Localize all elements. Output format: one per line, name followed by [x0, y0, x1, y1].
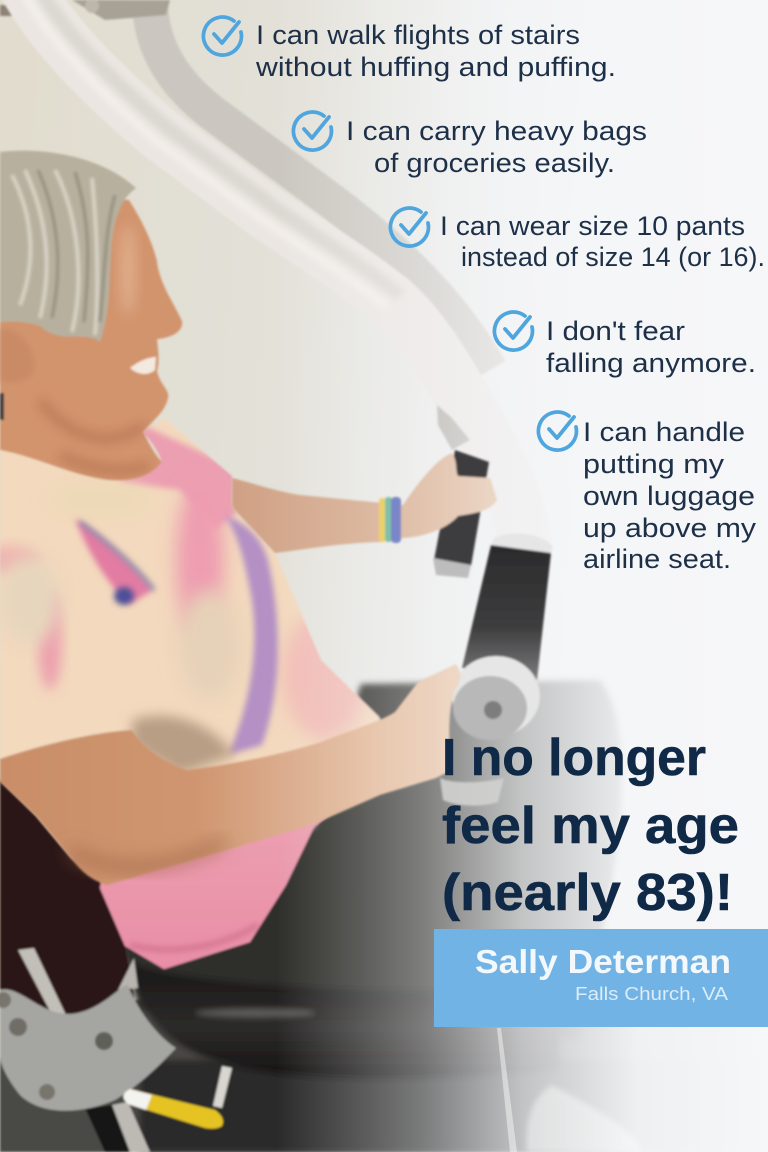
icon: check: [494, 312, 532, 350]
text: falling anymore.: [546, 348, 756, 378]
main tube: [22, 0, 525, 545]
text: instead of size 14 (or 16).: [461, 242, 765, 272]
text: putting my: [583, 449, 725, 479]
text: [346, 116, 647, 178]
backrest: [100, 680, 622, 1040]
yellow adjustment pin: [123, 1089, 223, 1129]
machine rear tube: [150, 5, 490, 370]
headline: (nearly 83)!: [442, 864, 733, 922]
grey seat plate: [0, 985, 176, 1111]
arm shading: [70, 842, 225, 867]
icon: check: [538, 412, 576, 450]
machine top bracket: [72, 0, 170, 20]
hair strands: [12, 170, 97, 335]
large grip: [462, 545, 551, 680]
benefit 1: [203, 17, 616, 82]
tube joint below bend: [437, 405, 470, 450]
icon: check: [390, 208, 428, 246]
small grip silver end: [433, 558, 471, 578]
ear: [0, 328, 35, 383]
near arm and hand: [0, 664, 460, 885]
lower silver collar: [440, 778, 504, 806]
far arm and hand: [232, 453, 497, 553]
cushion highlight: [195, 1008, 315, 1018]
silver disc: [452, 656, 540, 736]
icon: check: [203, 17, 241, 55]
benefit 4: [494, 312, 756, 378]
disc face: [453, 676, 527, 740]
text: I don't fear: [546, 316, 685, 346]
text: of groceries easily.: [374, 148, 615, 178]
small grip: [434, 450, 489, 566]
icon: check: [293, 112, 331, 150]
text: own luggage: [583, 481, 755, 511]
blue box: [434, 929, 768, 1027]
earpiece dark: [0, 393, 4, 420]
text: I can carry heavy bags: [346, 116, 647, 146]
pink hem: [98, 819, 324, 970]
left dark seat back: [0, 780, 140, 1030]
text: I can handle: [583, 417, 745, 447]
text: [546, 316, 756, 378]
arms and handle assembly: [0, 450, 553, 885]
text: airline seat.: [583, 544, 731, 574]
head and neck: [0, 198, 182, 480]
benefit 5: [538, 412, 757, 574]
faint shoe bottom right: [497, 1028, 640, 1152]
name: Sally Determan: [475, 943, 731, 980]
seat strap: [18, 948, 66, 1015]
benefit 2: [293, 112, 647, 178]
bracket bolt: [85, 0, 99, 13]
hair: [0, 151, 136, 342]
floor shadow under seat: [140, 1060, 760, 1152]
text: without huffing and puffing.: [255, 52, 616, 82]
headline: I no longer: [442, 729, 706, 787]
pink right panel: [283, 610, 367, 740]
shirt: [0, 400, 400, 985]
benefit 3: [390, 208, 765, 272]
text: I can wear size 10 pants: [440, 211, 745, 241]
text: I can walk flights of stairs: [256, 20, 580, 50]
pink shoulder: [120, 425, 240, 530]
plate bolts: [9, 1018, 27, 1036]
tube end collar: [490, 533, 553, 556]
text: [583, 417, 757, 574]
floor: [0, 1000, 768, 1152]
text: [255, 20, 616, 82]
dye mark: [75, 518, 153, 604]
smile teeth: [130, 357, 156, 374]
under-arm shadow: [132, 716, 235, 775]
bracelet: [379, 497, 401, 543]
text: up above my: [583, 513, 757, 543]
neck shading: [40, 400, 150, 470]
seat cushion: [130, 965, 560, 1079]
location: Falls Church, VA: [575, 984, 728, 1004]
text: [440, 211, 765, 272]
attribution panel: [434, 929, 768, 1027]
headline: feel my age: [442, 797, 739, 855]
purple band: [225, 515, 278, 755]
headline: [442, 729, 739, 922]
forehead highlight: [119, 225, 137, 315]
